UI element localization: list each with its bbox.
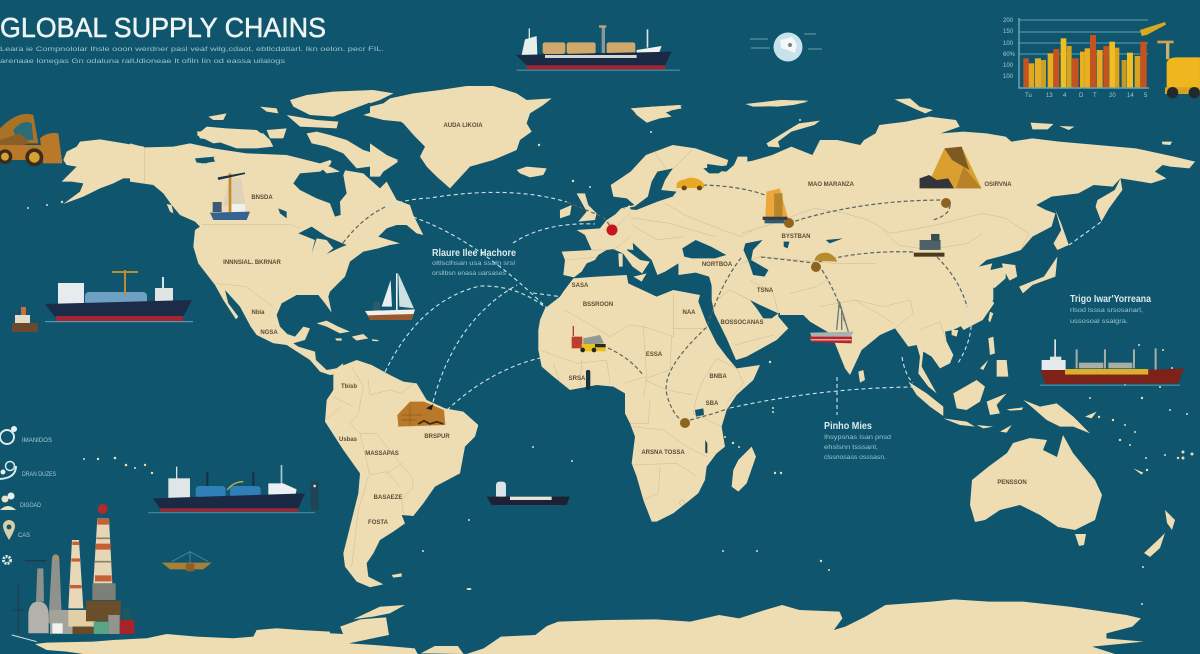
icon: industrial factory <box>12 504 134 642</box>
supply chain routes <box>343 185 1101 428</box>
callout: Indian Ocean: Ihsypsnas Isan pnsd <box>824 434 891 441</box>
country labels: BNBA <box>709 374 727 380</box>
country labels: MAO MARANZA <box>808 182 855 188</box>
country labels: BRSPUR <box>424 434 450 440</box>
icon: forklift <box>1140 22 1200 98</box>
chart axis labels: 13 <box>1046 93 1053 99</box>
country labels: ARSNA TOSSA <box>641 450 685 456</box>
icon: Atlantic tanker ship <box>148 465 319 513</box>
landmass: South America <box>325 360 478 619</box>
chart axis labels: 14 <box>1127 93 1134 99</box>
landmass: Africa <box>538 275 760 522</box>
landmass: North America <box>62 90 423 375</box>
chart axis labels: 60% <box>1003 52 1016 58</box>
icon: Brazil mine <box>397 402 445 427</box>
icon: Africa mining truck <box>572 326 606 390</box>
callout: Indian Ocean: ehslsnn tsssanl, <box>824 444 878 451</box>
icon: Central Asia factory block <box>814 234 944 262</box>
country labels: SBA <box>706 401 719 407</box>
callout: Indian Ocean <box>824 421 891 461</box>
country labels: MASSAPAS <box>365 451 399 457</box>
country labels: NAA <box>682 310 696 316</box>
country labels: OSIRVNA <box>984 182 1012 188</box>
legend item 2: DRAN DUZES <box>22 472 56 478</box>
icon: ore tower <box>763 188 788 223</box>
country labels: AUDA LIKOIA <box>443 123 483 129</box>
chart axis labels: 100 <box>1003 63 1014 69</box>
country labels: BASAEZE <box>374 495 402 501</box>
icon: yellow car <box>677 178 704 190</box>
chart axis labels: 150 <box>1003 29 1014 35</box>
small ocean islands <box>27 104 1194 605</box>
country labels: Usbas <box>339 437 358 443</box>
country labels: ESSA <box>646 352 663 358</box>
chart axis labels: T <box>1093 93 1097 99</box>
country labels: SRSA <box>569 376 586 382</box>
icon: Canada sail vessel <box>210 172 250 220</box>
country labels: BYSTBAN <box>781 234 811 240</box>
chart axis labels: Tu <box>1025 93 1032 99</box>
country labels: NORTBOA <box>702 262 733 268</box>
route: overland corridors <box>343 185 967 423</box>
country labels: SASA <box>572 283 589 289</box>
bar chart <box>1003 18 1149 99</box>
icon: Pacific tanker ship <box>45 270 193 322</box>
landmass: Greenland and northern islands <box>370 86 808 188</box>
country labels: NGSA <box>260 330 278 336</box>
icon: top tanker ship <box>516 25 680 71</box>
icon: dump truck <box>0 114 62 166</box>
chart axis labels: 200 <box>1003 18 1014 24</box>
callout: Indian Ocean: clssnosass osssasn. <box>824 454 886 461</box>
chart axis labels: 5 <box>1144 93 1148 99</box>
country labels: BNSDA <box>251 195 273 201</box>
chart axis labels: 4 <box>1063 93 1067 99</box>
callout: Pacific: ussosoal ssalgra. <box>1070 318 1128 325</box>
legend: left sidebar <box>0 426 56 564</box>
country labels: Tbisb <box>341 384 357 390</box>
legend item 1: IMANIDOS <box>22 438 52 444</box>
icon: sailboat <box>365 273 415 320</box>
chart bars <box>1023 35 1147 87</box>
country labels: PENSSON <box>997 480 1027 486</box>
country labels: Nbia <box>251 310 265 316</box>
subtitle text: arenaae lonegas Gn odaluna ralUdioneae It ofiln Iin od eassa uilalogs <box>0 58 286 65</box>
route: ocean arcs <box>385 192 1101 415</box>
route nodes <box>606 198 951 428</box>
callout: Atlantic: orsllbsn enasa uarsases <box>432 270 507 277</box>
icon: Arabian Sea ship <box>809 302 854 343</box>
landmass: Eurasia <box>600 98 1195 330</box>
chart axis labels: 100 <box>1003 41 1014 47</box>
landmass: Australia and New Zealand <box>970 435 1175 557</box>
title: GLOBAL SUPPLY CHAINS <box>0 12 326 43</box>
callout: Pacific: rlsod lsssa srsosanarl, <box>1070 307 1143 314</box>
country labels: BOSSOCANAS <box>720 320 764 326</box>
icon: mountain mine <box>920 147 982 188</box>
country labels <box>223 123 1027 526</box>
landmass: Arabia and South Asia <box>712 280 993 393</box>
subtitle text: Leara ie Compnololar Ihsle ooon werdner pasl veaf wilg,cdaot, ebtlcdatlarl. Ikn oelon. pecr FIL. <box>0 46 384 53</box>
chart axis labels <box>1003 18 1148 99</box>
country labels: FOSTA <box>368 520 389 526</box>
legend item 4: CAS <box>18 533 30 539</box>
country labels: INNNSIAL. BKRNAR <box>223 260 281 266</box>
country labels: BSSROON <box>583 302 613 308</box>
chart axis labels: 20 <box>1109 93 1116 99</box>
landmass: Southeast Asia and Oceania islands <box>908 337 1143 475</box>
icon: globe <box>750 32 822 62</box>
legend item 5 <box>4 556 10 564</box>
callout: Atlantic <box>432 248 516 277</box>
icon: Pacific cargo ship <box>1040 339 1184 386</box>
landmass: Antarctica <box>35 599 1144 654</box>
callout: Pacific: Trigo Iwar'Yorreana <box>1070 294 1151 305</box>
icon: small beacon <box>12 307 38 332</box>
callout: Atlantic: Rlaure Ilee Hachore <box>432 248 516 259</box>
legend item 3: DIGOAD <box>20 503 42 509</box>
callout: Pacific <box>1070 294 1151 325</box>
subtitle text <box>0 46 384 65</box>
callout: Atlantic: oltlsclhsan usa ssaln srsl <box>432 260 516 267</box>
chart axes and gridlines <box>1019 18 1149 88</box>
icon: wooden boat <box>162 551 212 572</box>
chart axis labels: 100 <box>1003 74 1014 80</box>
icon: South Atlantic freighter <box>487 482 570 505</box>
chart axis labels: D <box>1079 93 1084 99</box>
landmass: Western Europe <box>560 193 647 282</box>
callout: Indian Ocean: Pinho Mies <box>824 421 872 432</box>
country labels: TSNA <box>757 288 774 294</box>
